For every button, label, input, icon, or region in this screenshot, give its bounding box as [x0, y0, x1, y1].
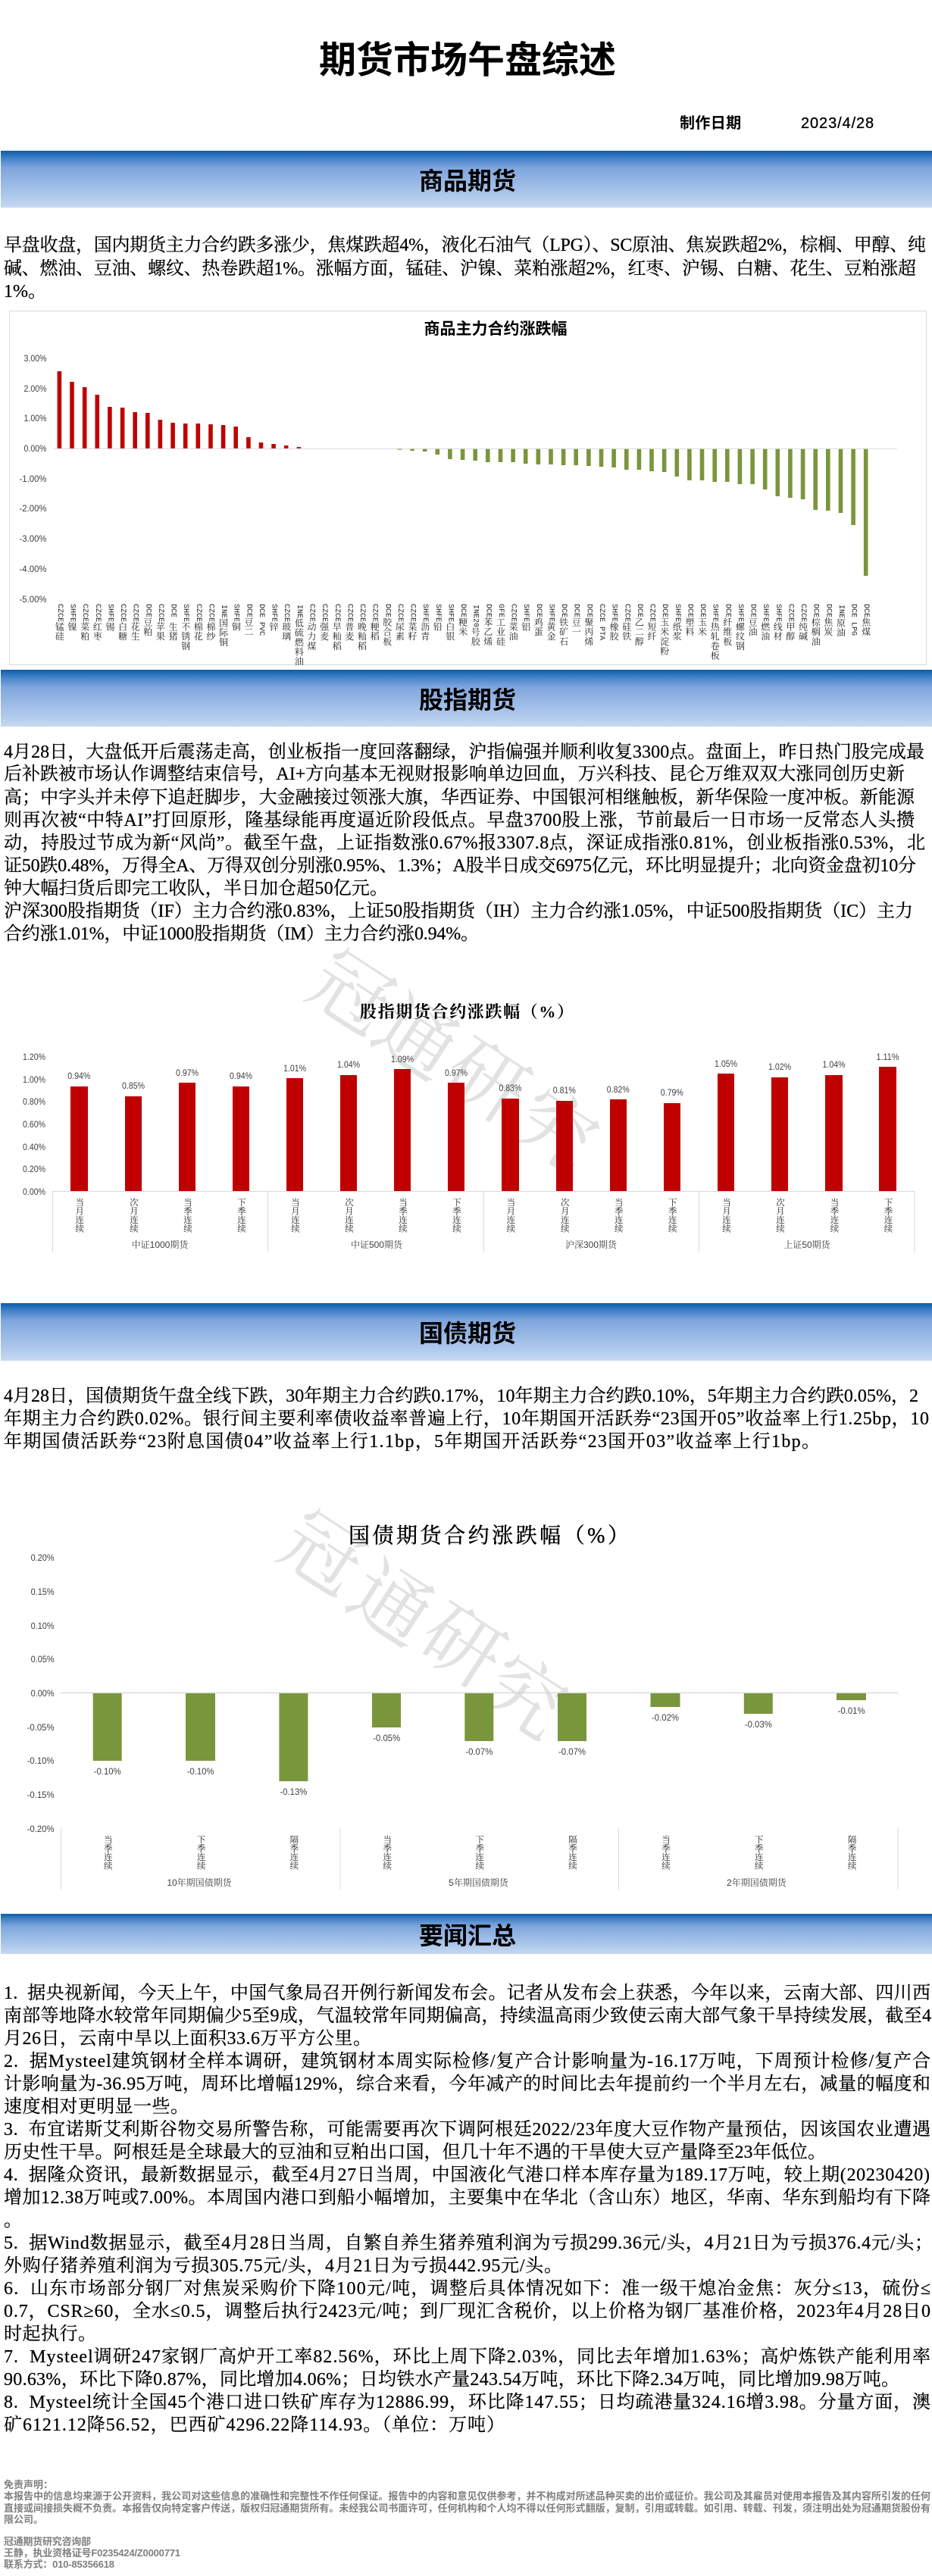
text block: news items: 月26日，云南中旱以上面积33.6万平方公里。	[4, 2028, 371, 2049]
contract labels: 下季连续	[474, 1835, 484, 1871]
contract labels: 当月连续	[505, 1197, 515, 1233]
text block: stock index futures summary: 动，持股过节成为新“风尚”。截至午盘，上证指数涨0.67%报3307.8点，深证成指涨0.81%，创业板指涨0.53%，北	[4, 833, 925, 853]
panel: commodity main contract chart	[9, 311, 927, 665]
text block: treasury futures summary: 4月28日，国债期货午盘全线下跌，30年期主力合约跌0.17%，10年期主力合约跌0.10%，5年期主力合约跌0.05%，2	[4, 1386, 918, 1406]
x axis contract labels: CZCE 花生	[130, 603, 140, 641]
text block: news items: 速度相对更明显一些。	[4, 2096, 189, 2117]
x axis contract labels: CZCE 棉花	[192, 603, 203, 641]
value labels: -0.13%	[280, 1787, 308, 1797]
value labels: 0.79%	[661, 1087, 683, 1098]
text block: stock index futures summary: 高；中字头并未停下追赶脚步，大金融接过领涨大旗，华西证券、中国银河相继触板，新华保险一度冲板。新能源	[4, 787, 915, 808]
contract labels: 隔季连续	[568, 1835, 577, 1871]
watermark: stock index chart: 究	[498, 1074, 612, 1190]
value labels: -0.07%	[465, 1746, 493, 1757]
value labels: -0.07%	[558, 1746, 586, 1757]
group labels: 中证1000期货	[132, 1239, 189, 1250]
value labels: 0.81%	[553, 1085, 576, 1096]
x axis contract labels: SHFE 锡	[104, 603, 114, 631]
text block: news items: 计影响量为-36.95万吨，周环比增幅129%，综合来看，今年减产的时间比去年提前约一个半月左右，减量的幅度和	[4, 2074, 930, 2094]
falling contract bars	[397, 449, 868, 576]
x axis contract labels: DCE PVC	[256, 603, 265, 636]
y axis labels: -5.00%	[19, 594, 46, 605]
contract labels: 当季连续	[382, 1834, 392, 1871]
watermark: stock index chart: 研	[429, 1024, 543, 1140]
section header: treasury futures: 国债期货	[419, 1320, 516, 1347]
x axis contract labels: DCE 胶合板	[381, 603, 392, 646]
group labels	[167, 1877, 787, 1888]
text block: news items: 增加12.38万吨或7.00%。本周国内港口到船小幅增加，主要集中在华北（含山东）地区，华南、华东到船均有下降	[4, 2187, 930, 2208]
section header: commodity futures: 商品期货	[419, 167, 516, 194]
x axis contract labels: CZCE 强麦	[318, 603, 329, 641]
production date	[680, 115, 874, 132]
x axis contract labels: INE 国际铜	[217, 605, 228, 646]
y axis labels: 0.40%	[23, 1142, 45, 1152]
value labels: -0.02%	[652, 1712, 679, 1723]
x axis contract labels: DCE 生猪	[167, 603, 178, 641]
contract labels: 次月连续	[129, 1197, 139, 1233]
title: 期货市场午盘综述	[319, 40, 616, 81]
text block: news items	[4, 1983, 932, 2435]
contract labels: 当季连续	[829, 1197, 839, 1233]
x axis contract labels: DCE 豆粕	[142, 603, 152, 636]
y axis labels: 0.20%	[31, 1552, 55, 1563]
contract labels: 当月连续	[721, 1197, 731, 1233]
text block: news items: 90.63%，环比下降0.87%，同比增加4.06%；日均铁水产量243.54万吨，环比下降2.34万吨，同比增加9.98万吨。	[4, 2369, 899, 2390]
contract labels	[74, 1197, 893, 1233]
value labels: 1.05%	[715, 1058, 737, 1069]
x axis contract labels: DCE 铁矿石	[558, 603, 568, 646]
production date: 2023/4/28	[801, 115, 874, 132]
y axis labels: -1.00%	[19, 473, 46, 483]
value labels: 0.94%	[230, 1071, 252, 1081]
y axis labels	[27, 1552, 55, 1834]
x axis contract labels: CZCE 普麦	[343, 603, 354, 641]
section header: commodity futures	[1, 151, 932, 208]
x axis contract labels: SHFE 镍	[67, 603, 77, 631]
x axis contract labels: SHFE 铅	[432, 603, 443, 631]
y axis labels	[19, 353, 46, 605]
text block: commodity futures summary	[4, 235, 926, 302]
y axis labels: -2.00%	[19, 503, 46, 514]
x axis contract labels: CZCE 白糖	[117, 603, 127, 641]
text block: news items: 8. Mysteel统计全国45个港口进口铁矿库存为12886.99，环比降147.55；日均疏港量324.16增3.98。分量方面，澳	[4, 2392, 930, 2412]
x axis contract labels: DCE 乙二醇	[633, 603, 644, 646]
x axis contract labels: CZCE 棉纱	[205, 603, 215, 641]
disclaimer and contact: 本报告中的信息均来源于公开资料，我公司对这些信息的准确性和完整性不作任何保证。报告中的内容和意见仅供参考，并不构成对所述品种买卖的出价或征价。我公司及其雇员对使用本报告及其内容所引发的任何	[4, 2490, 930, 2502]
x axis contract labels: DCE 棕榈油	[810, 603, 821, 646]
x axis contract labels: DCE 玉米淀粉	[658, 603, 669, 655]
x axis contract labels: CZCE 短纤	[646, 603, 656, 641]
y axis labels: -0.05%	[27, 1722, 55, 1733]
x axis contract labels: CZCE 尿素	[394, 603, 405, 641]
watermark: treasury chart: 通	[333, 1546, 448, 1663]
text block: treasury futures summary	[4, 1386, 929, 1452]
chart title: 股指期货合约涨跌幅（%）	[360, 1002, 574, 1021]
contract labels: 当季连续	[103, 1834, 112, 1871]
x axis contract labels: CZCE 粳稻	[369, 603, 380, 641]
value labels: 0.82%	[607, 1084, 630, 1095]
contract labels: 当季连续	[398, 1197, 408, 1233]
text block: news items: 历史性干旱。阿根廷是全球最大的豆油和豆粕出口国，但几十年不遇的干旱使大豆产量降至23年低位。	[4, 2142, 826, 2162]
bars	[93, 1693, 866, 1781]
value labels	[67, 1052, 899, 1098]
watermark: stock index chart	[293, 935, 612, 1190]
x axis contract labels: SHFE 线材	[772, 603, 783, 641]
value labels: 1.02%	[768, 1061, 791, 1072]
x axis contract labels: GFE 工业硅	[495, 603, 505, 646]
y axis labels: 0.10%	[31, 1621, 55, 1631]
disclaimer and contact	[4, 2479, 930, 2570]
x axis contract labels: DCE 鸡蛋	[533, 603, 543, 636]
y axis labels: 0.80%	[23, 1096, 45, 1107]
text block: commodity futures summary: 碱、燃油、豆油、螺纹、热卷跌超1%。涨幅方面，锰硅、沪镍、菜粕涨超2%，红枣、沪锡、白糖、花生、豆粕涨超	[4, 258, 916, 279]
value labels: 0.97%	[445, 1068, 468, 1078]
watermark: stock index chart: 冠	[293, 935, 408, 1052]
chart title: 国债期货合约涨跌幅（%）	[349, 1524, 629, 1548]
text block: commodity futures summary: 早盘收盘，国内期货主力合约跌多涨少，焦煤跌超4%，液化石油气（LPG）、SC原油、焦炭跌超2%，棕榈、甲醇、纯	[4, 235, 926, 255]
text block: news items: 4. 据隆众资讯，最新数据显示，截至4月27日当周，中国液化气港口样本库存量为189.17万吨，较上期(20230420)	[4, 2165, 930, 2185]
value labels: -0.10%	[94, 1766, 121, 1777]
x axis contract labels: SHFE 黄金	[546, 603, 556, 641]
y axis labels: 0.05%	[31, 1654, 55, 1665]
bars	[70, 1067, 896, 1191]
contract labels: 当季连续	[661, 1834, 671, 1871]
text block: stock index futures summary: 证50跌0.48%，万得全A、万得双创分别涨0.95%、1.3%；A股半日成交6975亿元，环比明显提升；北向资金盘初10分	[4, 855, 916, 876]
value labels: 0.83%	[499, 1083, 522, 1093]
contract labels: 当季连续	[614, 1197, 624, 1233]
value labels	[94, 1705, 865, 1797]
value labels: 1.04%	[823, 1059, 846, 1070]
watermark: treasury chart: 冠	[264, 1496, 379, 1612]
value labels: 1.11%	[876, 1052, 899, 1062]
x axis contract labels: DCE 豆二	[242, 603, 253, 636]
x axis contract labels: CZCE 硅铁	[621, 603, 631, 641]
x axis contract labels: CZCE 早籼稻	[331, 603, 342, 650]
contract labels: 下季连续	[452, 1198, 461, 1233]
section header: news roundup	[1, 1914, 932, 1954]
text block: commodity futures summary: 1%。	[4, 282, 46, 302]
chart: commodity bars	[19, 320, 897, 666]
x axis contract labels: SHFE 锌	[268, 603, 279, 631]
text block: news items: 5. 据Wind数据显示，截至4月28日当周，自繁自养生猪养殖利润为亏损299.36元/头，4月21日为亏损376.4元/头；	[4, 2233, 932, 2253]
x axis contract labels: DCE 苯乙烯	[482, 603, 493, 646]
text block: news items: 。	[4, 2211, 22, 2231]
contract labels: 当月连续	[74, 1197, 84, 1233]
value labels: -0.10%	[187, 1766, 214, 1777]
text block: news items: 时起执行。	[4, 2324, 96, 2344]
value labels: 1.01%	[283, 1063, 306, 1074]
text block: stock index futures summary: 则再次被“中特AI”打回原形，隆基绿能再度逼近阶段低点。早盘3700股上涨，节前最后一日市场一反常态人头攒	[4, 810, 915, 830]
contract labels: 次月连续	[775, 1197, 785, 1233]
production date: 制作日期	[680, 115, 742, 132]
text block: news items: 南部等地降水较常年同期偏少5至9成，气温较常年同期偏高，持续温高雨少致使云南大部气象干旱持续发展，截至4	[4, 2005, 931, 2026]
x axis contract labels: CZCE 菜油	[508, 603, 518, 641]
disclaimer and contact: 联系方式：010-85356618	[4, 2559, 114, 2570]
y axis labels: 3.00%	[23, 353, 46, 364]
x axis contract labels: DCE 豆油	[747, 603, 758, 636]
x axis contract labels: SHFE 纸浆	[671, 603, 682, 641]
value labels: 0.97%	[176, 1068, 199, 1078]
x axis contract labels: CZCE 动力煤	[306, 603, 317, 650]
contract labels: 下季连续	[668, 1198, 677, 1233]
x axis contract labels: INE 原油	[835, 605, 846, 637]
y axis labels: 0.20%	[23, 1164, 45, 1174]
y axis labels: 0.00%	[23, 1186, 45, 1197]
disclaimer and contact: 王静，执业资格证号F0235424/Z0000771	[4, 2547, 180, 2559]
x axis contract labels: DCE 玉米	[696, 603, 707, 636]
section header: stock index futures: 股指期货	[419, 686, 516, 714]
watermark: treasury chart	[264, 1496, 582, 1756]
rising contract bars	[57, 371, 301, 449]
group labels: 上证50期货	[783, 1239, 831, 1250]
contract labels: 下季连续	[196, 1835, 205, 1871]
x axis contract labels: CZCE 菜籽	[406, 603, 417, 641]
x axis contract labels: SHFE 橡胶	[608, 603, 619, 641]
x axis contract labels: SHFE 铝	[520, 603, 530, 631]
text block: news items: 7. Mysteel调研247家钢厂高炉开工率82.56%，环比上周下降2.03%，同比去年增加1.63%；高炉炼铁产能利用率	[4, 2346, 930, 2367]
section header: stock index futures	[1, 670, 932, 727]
value labels: -0.05%	[373, 1733, 401, 1743]
y axis labels: -0.15%	[27, 1790, 55, 1800]
watermark: stock index chart: 通	[358, 980, 473, 1097]
text block: news items: 3. 布宜诺斯艾利斯谷物交易所警告称，可能需要再次下调阿根廷2022/23年度大豆作物产量预估，因该国农业遭遇	[4, 2119, 930, 2140]
contract labels: 隔季连续	[289, 1835, 299, 1871]
y axis labels: 0.60%	[23, 1119, 45, 1130]
x axis contract labels: SHFE 白银	[444, 603, 455, 641]
group labels: 沪深300期货	[565, 1239, 618, 1250]
x axis contract labels: SHFE 燃油	[759, 603, 770, 641]
group labels: 10年期国债期货	[167, 1877, 233, 1888]
text block: stock index futures summary: 4月28日，大盘低开后震荡走高，创业板指一度回落翻绿，沪指偏强并顺利收复3300点。盘面上，昨日热门股完成最	[4, 742, 924, 762]
value labels: -0.01%	[838, 1705, 865, 1716]
y axis labels: 0.15%	[31, 1587, 55, 1597]
x axis contract labels: DCE 焦煤	[860, 603, 871, 636]
x axis contract labels: CZCE PTA	[597, 603, 605, 640]
value labels: 1.09%	[391, 1054, 414, 1064]
x axis contract labels: CZCE 玻璃	[280, 603, 291, 641]
contract labels: 隔季连续	[847, 1835, 856, 1871]
chart title: 商品主力合约涨跌幅	[424, 320, 567, 338]
x axis contract labels: DCE LPG	[849, 603, 857, 636]
value labels: -0.03%	[745, 1719, 772, 1730]
text block: stock index futures summary: 后补跌被市场认作调整结束信号，AI+方向基本无视财报影响单边回血，万兴科技、昆仑万维双双大涨同创历史新	[4, 764, 905, 784]
value labels: 1.04%	[337, 1059, 360, 1070]
x axis contract labels: CZCE 苹果	[155, 603, 165, 641]
x axis contract labels: SHFE 热轧卷板	[709, 603, 720, 660]
text block: news items: 0.7，CSR≥60，全水≤0.5，调整后执行2423元/吨；到厂现汇含税价，以上价格为钢厂基准价格，2023年4月28日0	[4, 2301, 930, 2321]
contract labels: 当季连续	[183, 1197, 192, 1233]
contract labels: 下季连续	[236, 1198, 246, 1233]
group labels: 2年期国债期货	[727, 1877, 787, 1888]
text block: stock index futures summary: 钟大幅扫货后即完工收队，半日加仓超50亿元。	[4, 878, 388, 899]
x axis contract labels: DCE 纤维板	[721, 603, 732, 646]
text block: stock index futures summary	[4, 742, 925, 944]
text block: news items: 矿6121.12降56.52，巴西矿4296.22降114.93。（单位：万吨）	[4, 2415, 505, 2435]
y axis labels: 0.00%	[23, 442, 46, 453]
watermark: treasury chart: 究	[468, 1640, 582, 1756]
group labels: 中证500期货	[351, 1239, 403, 1250]
x axis contract labels: SHFE 沥青	[419, 603, 430, 641]
group labels	[132, 1239, 831, 1250]
disclaimer and contact: 冠通期货研究咨询部	[4, 2536, 91, 2547]
text block: stock index futures summary: 沪深300股指期货（IF）主力合约涨0.83%，上证50股指期货（IH）主力合约涨1.05%，中证500股指期货（IC）主力	[4, 901, 913, 921]
section header: treasury futures	[1, 1303, 932, 1361]
text block: news items: 6. 山东市场部分钢厂对焦炭采购价下降100元/吨，调整后具体情况如下：准一级干熄冶金焦：灰分≤13，硫份≤	[4, 2278, 930, 2299]
y axis labels: -3.00%	[19, 533, 46, 544]
disclaimer and contact: 免责声明：	[4, 2479, 53, 2490]
x axis contract labels	[54, 603, 871, 666]
y axis labels: 1.00%	[23, 1074, 45, 1085]
y axis labels: 2.00%	[23, 383, 46, 394]
text block: news items: 外购仔猪养殖利润为亏损305.75元/头，4月21日为亏损442.95元/头。	[4, 2256, 562, 2276]
x axis contract labels: CZCE 晚籼稻	[356, 603, 367, 650]
x axis contract labels: SHFE 螺纹钢	[734, 603, 745, 650]
contract labels: 下季连续	[884, 1198, 893, 1233]
contract labels	[103, 1834, 856, 1871]
y axis labels: 0.00%	[31, 1688, 55, 1699]
x axis contract labels: INE20 号胶	[470, 605, 480, 646]
y axis labels: 1.20%	[23, 1052, 45, 1062]
x axis contract labels: CZCE 纯碱	[797, 603, 808, 641]
x axis contract labels: DCE 聚丙烯	[583, 603, 593, 646]
x axis contract labels: DCE 粳米	[457, 603, 468, 636]
x axis contract labels: DCE 焦炭	[822, 603, 833, 636]
x axis contract labels: SHFE 铜	[230, 603, 241, 631]
contract labels: 次月连续	[560, 1197, 570, 1233]
disclaimer and contact: 直接或间接损失概不负责。本报告仅向特定客户传送，版权归冠通期货所有。未经我公司书面许可，任何机构和个人均不得以任何形式翻版，复制，引用或转载。如引用、转载、刊发，须注明出处为冠通期货股份有	[4, 2503, 930, 2514]
text block: news items: 1. 据央视新闻，今天上午，中国气象局召开例行新闻发布会。记者从发布会上获悉，今年以来，云南大部、四川西	[4, 1983, 930, 2003]
x axis contract labels: DCE 塑料	[683, 603, 694, 636]
text block: stock index futures summary: 合约涨1.01%，中证1000股指期货（IM）主力合约涨0.94%。	[4, 924, 479, 944]
text block: news items: 2. 据Mysteel建筑钢材全样本调研，建筑钢材本周实际检修/复产合计影响量为-16.17万吨，下周预计检修/复产合	[4, 2051, 930, 2071]
value labels: 0.94%	[67, 1071, 91, 1081]
watermark: treasury chart: 研	[405, 1589, 519, 1705]
contract labels: 下季连续	[754, 1835, 764, 1871]
x axis contract labels: SHFE 不锈钢	[180, 603, 190, 650]
x axis contract labels: DCE 豆一	[571, 603, 581, 636]
x axis contract labels: CZCE 红枣	[92, 603, 102, 641]
chart: treasury futures contracts	[27, 1524, 899, 1890]
contract labels: 当月连续	[290, 1197, 300, 1233]
text block: treasury futures summary: 年期国债活跃券“23附息国债04”收益率上行1.1bp，5年期国开活跃券“23国开03”收益率上行1bp。	[4, 1431, 820, 1452]
x axis contract labels: CZCE 甲醇	[784, 603, 795, 641]
contract labels: 次月连续	[344, 1197, 354, 1233]
y axis labels: -0.10%	[27, 1755, 55, 1766]
x axis contract labels: CZCE 锰硅	[54, 603, 64, 641]
x axis contract labels: CZCE 菜粕	[79, 603, 89, 641]
y axis labels: -4.00%	[19, 564, 46, 574]
y axis labels: -0.20%	[27, 1824, 55, 1834]
disclaimer and contact: 限公司。	[4, 2514, 43, 2525]
y axis labels: 1.00%	[23, 412, 46, 423]
text block: treasury futures summary: 年期主力合约跌0.02%。银行间主要利率债收益率普遍上行，10年期国开活跃券“23国开05”收益率上行1.25bp，10	[4, 1408, 929, 1429]
y axis labels	[23, 1052, 45, 1197]
x axis contract labels: INE 低硫燃料油	[293, 605, 304, 666]
chart: stock index futures contracts	[23, 1002, 915, 1252]
value labels: 0.85%	[122, 1080, 145, 1091]
section header: news roundup: 要闻汇总	[419, 1921, 516, 1949]
group labels: 5年期国债期货	[449, 1877, 509, 1888]
